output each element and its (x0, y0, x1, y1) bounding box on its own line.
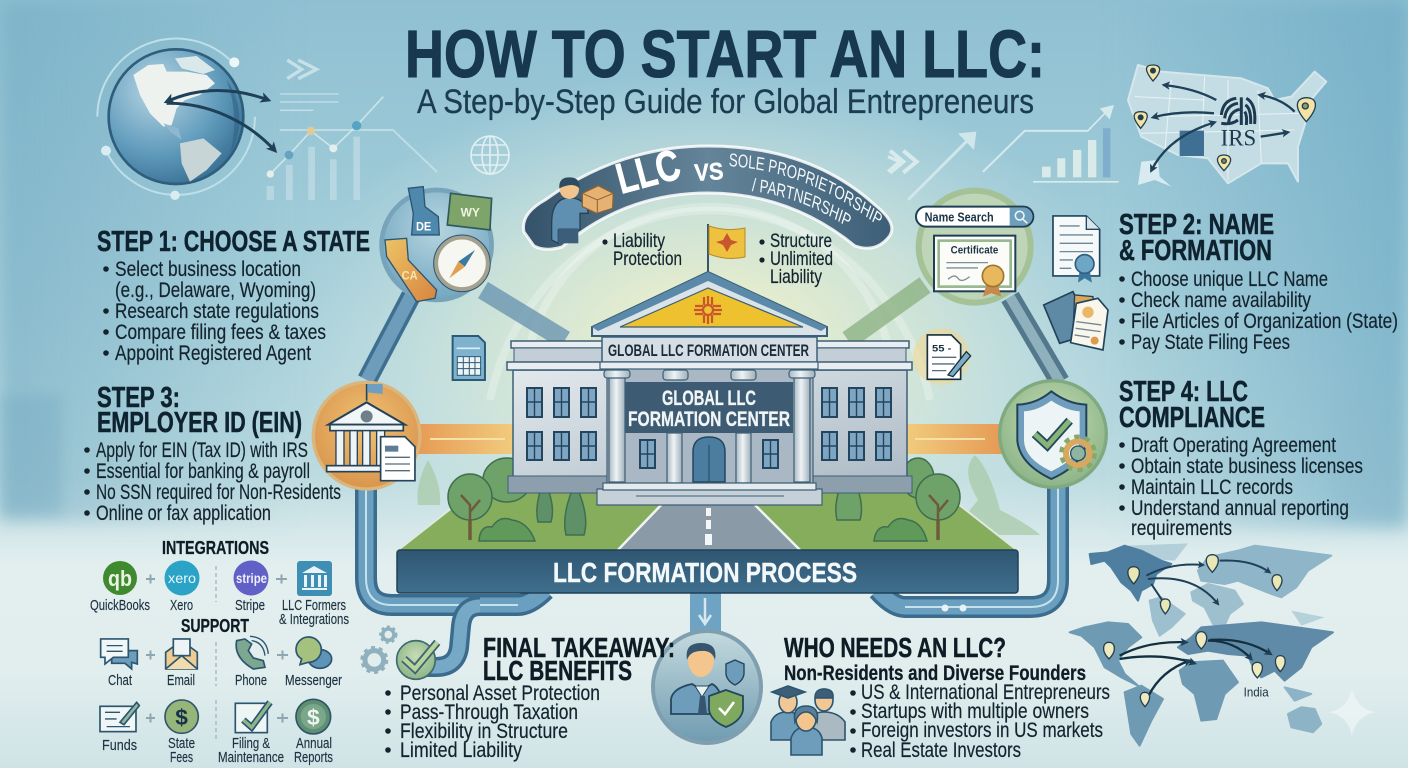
step 2 text: Check name availability (1131, 288, 1311, 312)
icon: Stripe (234, 560, 268, 596)
icon: chat (101, 639, 137, 669)
icon: Xero: xero (168, 570, 196, 586)
subtitle: A Step-by-Step Guide for Global Entrepreneurs (417, 83, 1034, 121)
icon: calculator sheet (453, 336, 485, 380)
step 1 text: (e.g., Delaware, Wyoming) (115, 278, 316, 302)
lower connector pipes (366, 480, 1058, 667)
final takeaway text: Pass-Through Taxation (400, 700, 578, 724)
icon: state fees: $ (175, 705, 188, 730)
support labels: Maintenance (218, 750, 284, 766)
icon: phone (236, 636, 268, 669)
search bar: Name Search (925, 211, 994, 225)
pediment (592, 272, 827, 336)
step 2 text: Pay State Filing Fees (1131, 330, 1290, 354)
integration labels (90, 598, 349, 628)
integration labels: Stripe (235, 598, 265, 614)
banner heading LLC: LLC (611, 141, 685, 204)
central building (507, 224, 912, 505)
step 2 text (1119, 209, 1398, 354)
step 1 text: STEP 1: CHOOSE A STATE (97, 226, 370, 258)
support labels: Messenger (285, 673, 342, 689)
zia symbol (694, 296, 722, 324)
support labels (102, 673, 342, 766)
banner heading VS: VS (694, 158, 724, 187)
icon: LLC formers bank (297, 561, 332, 596)
icon: gears and check (362, 627, 437, 679)
step 3 text: No SSN required for Non-Residents (96, 480, 341, 504)
who needs an LLC text: Non-Residents and Diverse Founders (784, 662, 1086, 685)
comparison right bullets: Structure (770, 230, 832, 252)
icon: funds (100, 702, 139, 732)
integrations panel: INTEGRATIONS (162, 537, 269, 558)
step 2 text: STEP 2: NAME (1119, 209, 1274, 241)
step 3 text (84, 382, 341, 525)
upper world map (1090, 543, 1331, 636)
portico (607, 368, 813, 484)
step 1 icon: state map and compass: WY (461, 206, 480, 220)
who needs an LLC text: US & International Entrepreneurs (861, 680, 1110, 704)
columns (604, 370, 815, 483)
support labels: Filing & (232, 736, 270, 752)
step 3 icon: bank and EIN form (313, 382, 420, 489)
step 4 text: Maintain LLC records (1131, 475, 1293, 499)
entablature sign: GLOBAL LLC FORMATION CENTER (608, 341, 809, 360)
icon: diverse founders (771, 686, 845, 755)
title (405, 17, 1045, 121)
icon: Stripe: stripe (236, 570, 267, 586)
icon: annual reports (296, 699, 331, 734)
step 1 text (97, 226, 370, 365)
who needs an LLC text (784, 632, 1110, 762)
icon: messenger (296, 637, 332, 668)
who needs an LLC text: Real Estate Investors (861, 738, 1021, 762)
final takeaway text: Flexibility in Structure (400, 719, 568, 743)
step 2 icon: name search and certificate (916, 191, 1033, 303)
support labels: Phone (235, 673, 267, 689)
step 3 text: STEP 3: (97, 382, 180, 414)
banner subheading: SOLE PROPRIETORSHIP (729, 154, 882, 222)
title: HOW TO START AN LLC: (405, 17, 1045, 92)
final takeaway text: FINAL TAKEAWAY: (483, 632, 675, 663)
icon: filing check (235, 702, 270, 733)
IRS eagle mark (1221, 97, 1255, 125)
icon: form with pencil: 55 - (932, 344, 951, 354)
wings (513, 370, 907, 478)
integration labels: Xero (170, 598, 193, 614)
IRS label: IRS (1221, 126, 1256, 152)
comparison left bullets: Liability (613, 230, 665, 252)
final takeaway text: Personal Asset Protection (400, 681, 600, 705)
step 2 text: Choose unique LLC Name (1131, 267, 1328, 291)
support panel: SUPPORT (181, 615, 250, 636)
chevrons near banner (890, 151, 917, 173)
step 1 icon: state map and compass: DE (416, 220, 431, 234)
step 3 text: Essential for banking & payroll (96, 459, 310, 483)
step 1 text: Appoint Registered Agent (115, 341, 311, 365)
who needs an LLC text: WHO NEEDS AN LLC? (784, 632, 1006, 663)
support panel (100, 615, 342, 766)
icon: QuickBooks: qb (108, 566, 132, 591)
integration labels: QuickBooks (90, 598, 150, 614)
who needs an LLC text: Startups with multiple owners (861, 699, 1089, 723)
step 1 text: Select business location (115, 257, 301, 281)
step 1 icon: state map and compass: CA (402, 268, 418, 282)
icon: stacked papers (1044, 292, 1108, 350)
US map with IRS (1128, 65, 1326, 187)
step 4 icon: shield and gear (1000, 381, 1106, 487)
lower banner text: FORMATION CENTER (628, 408, 790, 431)
step 4 text: STEP 4: LLC (1119, 376, 1248, 408)
lower banner text (625, 382, 793, 433)
icon: document with seal (1053, 216, 1100, 283)
icon: advisor with shield (653, 631, 761, 743)
step 2 text: & FORMATION (1119, 235, 1272, 267)
support labels: Chat (108, 673, 132, 689)
process band: LLC FORMATION PROCESS (553, 557, 857, 588)
icon: state fees (165, 700, 198, 733)
icon: QuickBooks (103, 561, 137, 595)
icon: annual reports: $ (307, 705, 320, 730)
world maps with routes (1070, 543, 1376, 746)
integrations panel (90, 537, 349, 740)
step 1 text: Research state regulations (115, 299, 319, 323)
flag (708, 224, 745, 274)
icon: form with pencil (913, 328, 971, 385)
steps (597, 489, 822, 505)
final takeaway text (385, 632, 675, 762)
final takeaway text: Limited Liability (400, 738, 522, 762)
lower world map (1070, 622, 1333, 746)
certificate: Certificate (951, 244, 998, 256)
icon: small wire globe (471, 136, 509, 174)
icon: person with box (552, 177, 613, 243)
step 3 text: EMPLOYER ID (EIN) (97, 407, 302, 439)
platform with landscape (397, 455, 1040, 551)
comparison left bullets (602, 230, 682, 270)
icon: email (166, 639, 197, 669)
India label: India (1244, 685, 1269, 700)
step 4 text: requirements (1131, 516, 1232, 540)
comparison left bullets: Protection (613, 248, 682, 270)
step 3 text: Online or fax application (96, 501, 271, 525)
step 4 text: Understand annual reporting (1131, 496, 1349, 520)
support labels: Reports (294, 750, 333, 766)
comparison right bullets: Unlimited (770, 248, 833, 270)
support labels: State (168, 736, 195, 752)
orange connector bands (415, 424, 1002, 454)
final takeaway text: LLC BENEFITS (483, 655, 632, 686)
integration labels: & Integrations (279, 612, 349, 628)
trees (448, 458, 960, 541)
comparison banner (522, 141, 894, 251)
step 4 text (1119, 376, 1363, 540)
support labels: Funds (102, 738, 137, 754)
comparison right bullets (759, 230, 833, 288)
entablature sign (602, 337, 817, 362)
integration labels: LLC Formers (282, 598, 346, 614)
lower banner text: GLOBAL LLC (662, 387, 756, 410)
chart: faint growth bars left (267, 60, 383, 200)
process band (397, 550, 1018, 593)
step 4 text: COMPLIANCE (1119, 402, 1265, 434)
support labels: Fees (170, 750, 193, 766)
icon: globe with arrows (97, 39, 275, 200)
icon: Xero (164, 560, 200, 596)
step 4 text: Draft Operating Agreement (1131, 433, 1336, 457)
windows (527, 388, 891, 460)
step 1 icon: state map and compass (382, 187, 492, 302)
step 3 text: Apply for EIN (Tax ID) with IRS (96, 438, 308, 462)
step 1 text: Compare filing fees & taxes (115, 320, 326, 344)
who needs an LLC text: Foreign investors in US markets (861, 718, 1103, 742)
chart: faint growth bars right (888, 105, 1119, 200)
support labels: Email (167, 673, 195, 689)
sparkle (1329, 688, 1376, 736)
support labels: Annual (296, 736, 332, 752)
comparison right bullets: Liability (770, 266, 822, 288)
banner subheading line 2: / PARTNERSHIP (752, 178, 851, 224)
upper connector pipes (367, 285, 1060, 382)
